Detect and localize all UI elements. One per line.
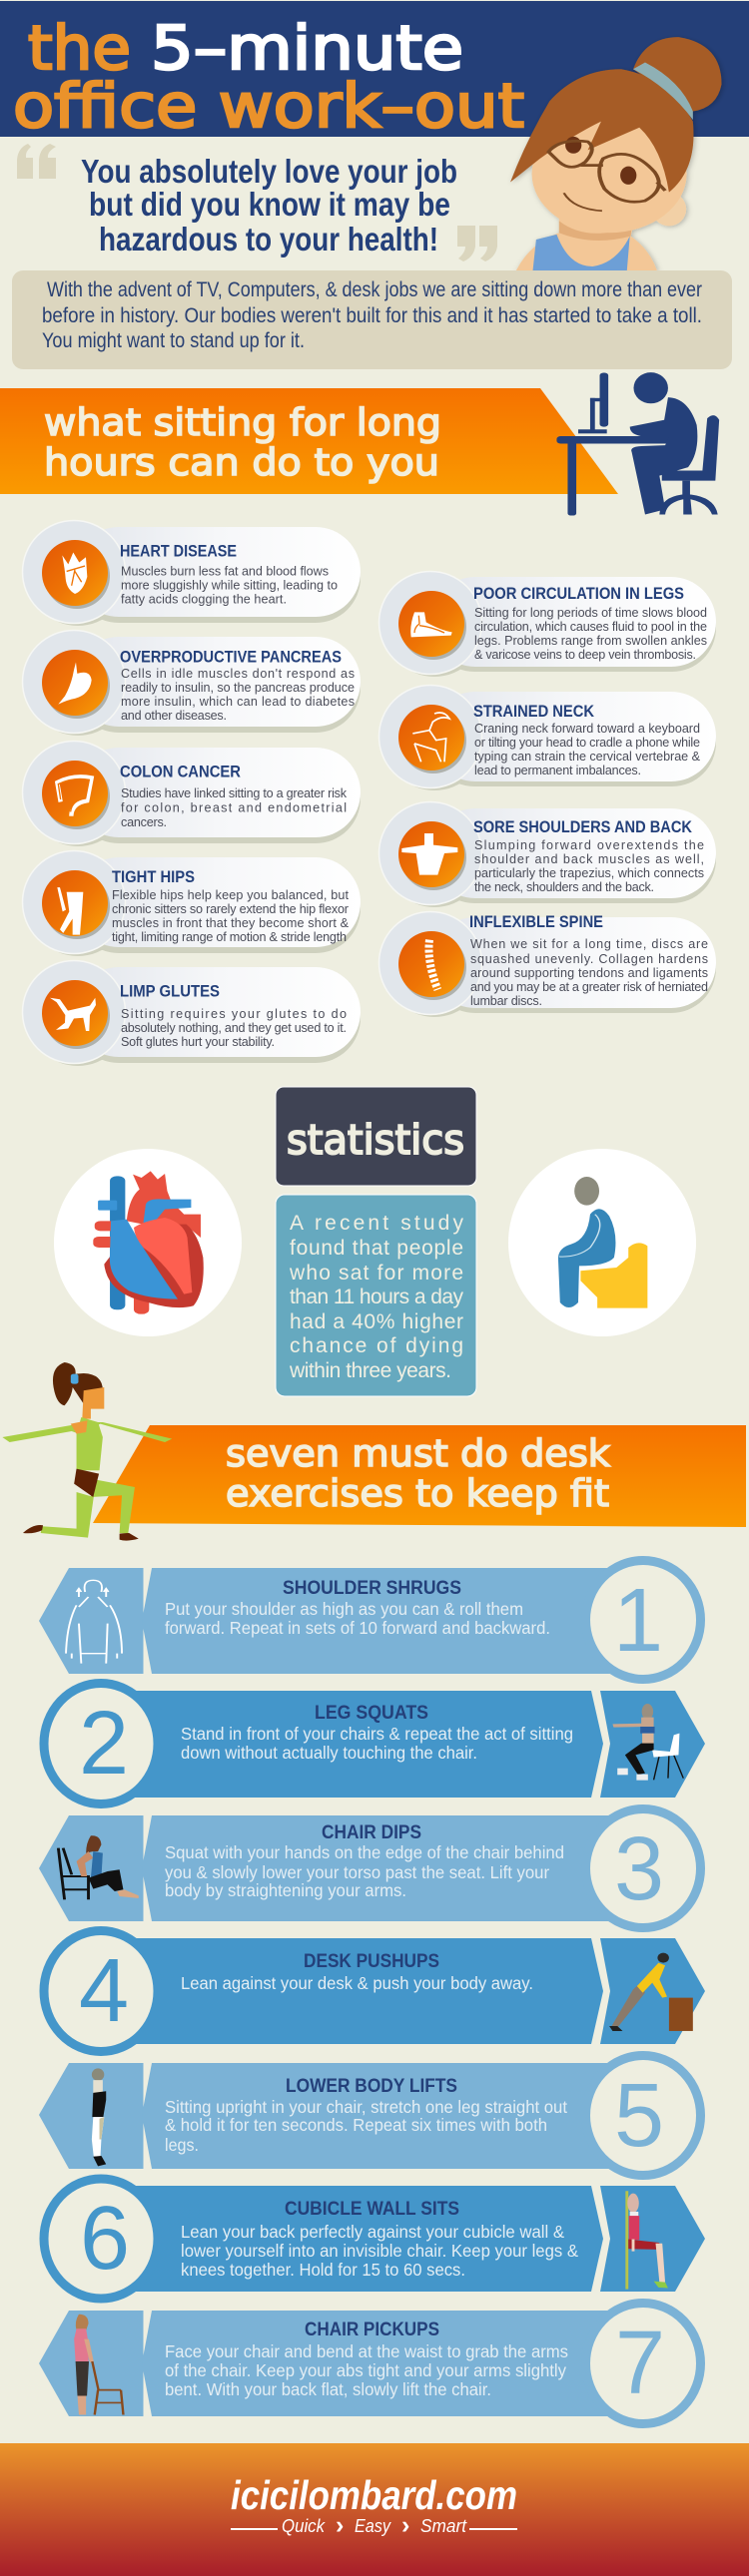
card: strained neck: lead to permanent imbalances. (474, 764, 641, 777)
banner: seven exercises: exercises to keep fit (226, 1472, 609, 1515)
footer: › (336, 2511, 344, 2539)
card: sore shoulders and back: SORE SHOULDERS AND BACK (473, 817, 693, 836)
banner: what sitting (0, 388, 618, 494)
icon: person at desk (556, 372, 719, 515)
footer (0, 2443, 749, 2576)
card: poor circulation in legs (379, 571, 716, 677)
card: overproductive pancreas: OVERPRODUCTIVE PANCREAS (120, 647, 342, 667)
card: sore shoulders and back: shoulder and back muscles as well, (474, 852, 704, 866)
card: inflexible spine: and you may be at a greater risk of herniated (470, 980, 708, 994)
exercise 4: 4 (79, 1941, 129, 2041)
exercise 2 (44, 1683, 705, 1804)
exercise 4: DESK PUSHUPS (304, 1950, 439, 1972)
card: heart disease (22, 521, 361, 626)
card: overproductive pancreas: and other diseases. (121, 709, 227, 723)
card: inflexible spine: lumbar discs. (470, 994, 542, 1008)
card: tight hips: muscles in front that they become short & (112, 916, 350, 930)
exercise 1: 1 (613, 1571, 663, 1671)
statistics text box: chance of dying (290, 1334, 463, 1357)
card: strained neck: typing can strain the cervical vertebrae & (474, 750, 701, 764)
card: sore shoulders and back: the neck, shoulders and the back. (474, 880, 654, 894)
exercise 3: CHAIR DIPS (322, 1821, 421, 1843)
exercise 6: knees together. Hold for 15 to 60 secs. (181, 2260, 465, 2280)
footer: › (401, 2511, 409, 2539)
statistics heading box: statistics (287, 1116, 464, 1164)
card: heart disease: fatty acids clogging the heart. (121, 593, 287, 607)
card: overproductive pancreas: Cells in idle muscles don't respond as (121, 667, 355, 681)
icon: desk pushup figure (609, 1953, 693, 2031)
icon: glutes (50, 998, 96, 1031)
card: strained neck: STRAINED NECK (473, 702, 595, 721)
exercise 6: Lean your back perfectly against your cubicle wall & (181, 2222, 564, 2242)
icon: chair dip figure (58, 1835, 139, 1899)
footer: Easy (355, 2516, 391, 2536)
exercise 7: Face your chair and bend at the waist to grab the arms (165, 2341, 568, 2361)
statistics text box: within three years. (289, 1359, 451, 1382)
title: 5–minute (151, 13, 463, 84)
exercise 1: SHOULDER SHRUGS (283, 1577, 461, 1599)
icon: neck (412, 713, 449, 762)
card: inflexible spine (379, 912, 716, 1017)
exercise 7 (39, 2304, 701, 2423)
card: limp glutes: absolutely nothing, and they get used to it. (121, 1021, 347, 1035)
icon: shoulder shrug (66, 1580, 122, 1664)
card: tight hips (22, 850, 361, 956)
icon: hips (57, 887, 83, 935)
exercise 1 (39, 1561, 701, 1679)
card: colon cancer: cancers. (121, 815, 167, 829)
exercise 5: & hold it for ten seconds. Repeat six times with both (165, 2115, 547, 2135)
exercise 7: bent. With your back flat, slowly lift the chair. (165, 2379, 491, 2399)
card: inflexible spine: INFLEXIBLE SPINE (469, 912, 603, 931)
card: strained neck (379, 685, 716, 790)
illustration: woman with glasses (510, 37, 722, 270)
exercise 7: 7 (615, 2314, 665, 2413)
exercise 2: 2 (79, 1694, 129, 1794)
statistics text box: A recent study (290, 1212, 463, 1235)
card: limp glutes (22, 960, 361, 1066)
card: limp glutes: Sitting requires your glutes to do (121, 1007, 347, 1021)
exercise 6: 6 (80, 2189, 130, 2289)
exercise 5: LOWER BODY LIFTS (286, 2075, 457, 2097)
statistics heading box (276, 1087, 476, 1186)
header band (0, 1, 749, 137)
exercise 2: LEG SQUATS (315, 1702, 428, 1724)
card: poor circulation in legs: Sitting for long periods of time slows blood (474, 606, 707, 620)
card: strained neck: Craning neck forward toward a keyboard (474, 722, 700, 736)
card: heart disease: more sluggishly while sitting, leading to (121, 579, 338, 593)
illustration: sitting figure (508, 1149, 696, 1336)
card: inflexible spine: squashed unevenly. Collagen hardens (470, 952, 708, 966)
headline quote: but did you know it may be (89, 186, 450, 223)
card: colon cancer: Studies have linked sitting to a greater risk (121, 786, 348, 800)
card: tight hips: TIGHT HIPS (112, 867, 195, 886)
footer: icicilombard.com (231, 2472, 517, 2518)
card: poor circulation in legs: & varicose veins to deep vein thrombosis. (474, 648, 696, 662)
exercise 4: Lean against your desk & push your body away. (181, 1973, 533, 1993)
banner: seven exercises (93, 1425, 746, 1527)
exercise 6: CUBICLE WALL SITS (285, 2198, 459, 2220)
icon: wall sit figure (625, 2191, 668, 2290)
exercise 1: Put your shoulder as high as you can & roll them (165, 1599, 523, 1619)
banner: what sitting: hours can do to you (44, 441, 439, 484)
statistics text box: found that people (290, 1237, 463, 1260)
card: colon cancer: COLON CANCER (120, 763, 241, 780)
card: strained neck: or tilting your head to cradle a phone while (474, 736, 700, 750)
card: sore shoulders and back: Slumping forward overextends the (474, 838, 704, 852)
exercise 7: CHAIR PICKUPS (305, 2318, 439, 2340)
card: sore shoulders and back: particularly the trapezius, which connects (474, 866, 704, 880)
exercise 4 (44, 1930, 705, 2052)
headline quote: You absolutely love your job (81, 153, 457, 190)
card: limp glutes: Soft glutes hurt your stability. (121, 1035, 275, 1049)
card: heart disease: HEART DISEASE (120, 541, 237, 561)
card: poor circulation in legs: legs. Problems range from swollen ankles (474, 634, 707, 648)
intro panel (12, 270, 732, 369)
exercise 1: forward. Repeat in sets of 10 forward and backward. (165, 1618, 550, 1638)
exercise 5: 5 (614, 2066, 664, 2166)
exercise 3: Squat with your hands on the edge of the chair behind (165, 1842, 564, 1862)
icon: foot (410, 612, 452, 637)
card: tight hips: Flexible hips help keep you balanced, but (112, 888, 350, 902)
closing quote mark (457, 226, 497, 261)
exercise 7: of the chair. Keep your abs tight and your arms slightly (165, 2360, 566, 2380)
exercise 3 (39, 1808, 701, 1928)
banner: seven exercises: seven must do desk (226, 1432, 611, 1475)
icon: stomach (58, 663, 92, 705)
icon: standing figure (92, 2068, 106, 2166)
card: inflexible spine: around supporting tendons and ligaments (470, 966, 708, 980)
title: the (28, 13, 131, 84)
card: poor circulation in legs: circulation, which causes fluid to pool in the (474, 620, 707, 634)
card: sore shoulders and back (379, 802, 716, 907)
exercise 2: Stand in front of your chairs & repeat the act of sitting (181, 1724, 573, 1744)
icon: squat figure (612, 1704, 683, 1781)
exercise 5: Sitting upright in your chair, stretch one leg straight out (165, 2097, 567, 2117)
exercise 2: down without actually touching the chair. (181, 1743, 477, 1763)
exercise 3: body by straightening your arms. (165, 1880, 406, 1900)
icon: colon (57, 776, 92, 816)
exercise 6 (44, 2179, 705, 2299)
card: heart disease: Muscles burn less fat and blood flows (121, 565, 329, 579)
exercise 5 (39, 2056, 701, 2176)
exercise 3: you & slowly lower your torso past the seat. Lift your (165, 1862, 549, 1882)
headline quote: hazardous to your health! (99, 221, 438, 258)
icon: back (401, 833, 457, 875)
headline quote (81, 153, 457, 258)
card: tight hips: tight, limiting range of motion & stride length (112, 930, 347, 944)
statistics text box: had a 40% higher (290, 1310, 463, 1333)
intro panel: You might want to stand up for it. (42, 329, 305, 352)
statistics text box: who sat for more (289, 1262, 463, 1285)
icon: heart (62, 553, 87, 594)
card: overproductive pancreas: more insulin, which can lead to diabetes (121, 695, 355, 709)
statistics text box (276, 1195, 476, 1396)
title: office work–out (13, 71, 524, 142)
card: limp glutes: LIMP GLUTES (120, 982, 220, 1000)
statistics text box: than 11 hours a day (290, 1286, 463, 1308)
opening quote mark (17, 144, 56, 179)
card: colon cancer: for colon, breast and endometrial (121, 800, 347, 814)
footer: Smart (420, 2516, 467, 2536)
card: colon cancer (22, 741, 361, 846)
exercise 6: lower yourself into an invisible chair. Keep your legs & (181, 2241, 578, 2261)
illustration: woman lunging (2, 1362, 172, 1541)
card: overproductive pancreas (22, 631, 361, 736)
exercise 3: 3 (614, 1819, 664, 1919)
card: tight hips: chronic sitters so rarely extend the hip flexor (112, 902, 349, 916)
card: inflexible spine: When we sit for a long time, discs are (470, 937, 708, 951)
card: overproductive pancreas: readily to insulin, so the pancreas produce (121, 681, 355, 695)
footer: Quick (282, 2516, 326, 2536)
card: poor circulation in legs: POOR CIRCULATION IN LEGS (473, 584, 684, 603)
icon: chair pickup figure (74, 2315, 123, 2415)
exercise 5: legs. (165, 2135, 199, 2155)
illustration: heart (54, 1149, 242, 1336)
icon: spine (428, 940, 437, 990)
banner: what sitting: what sitting for long (44, 401, 441, 444)
title (13, 13, 524, 142)
